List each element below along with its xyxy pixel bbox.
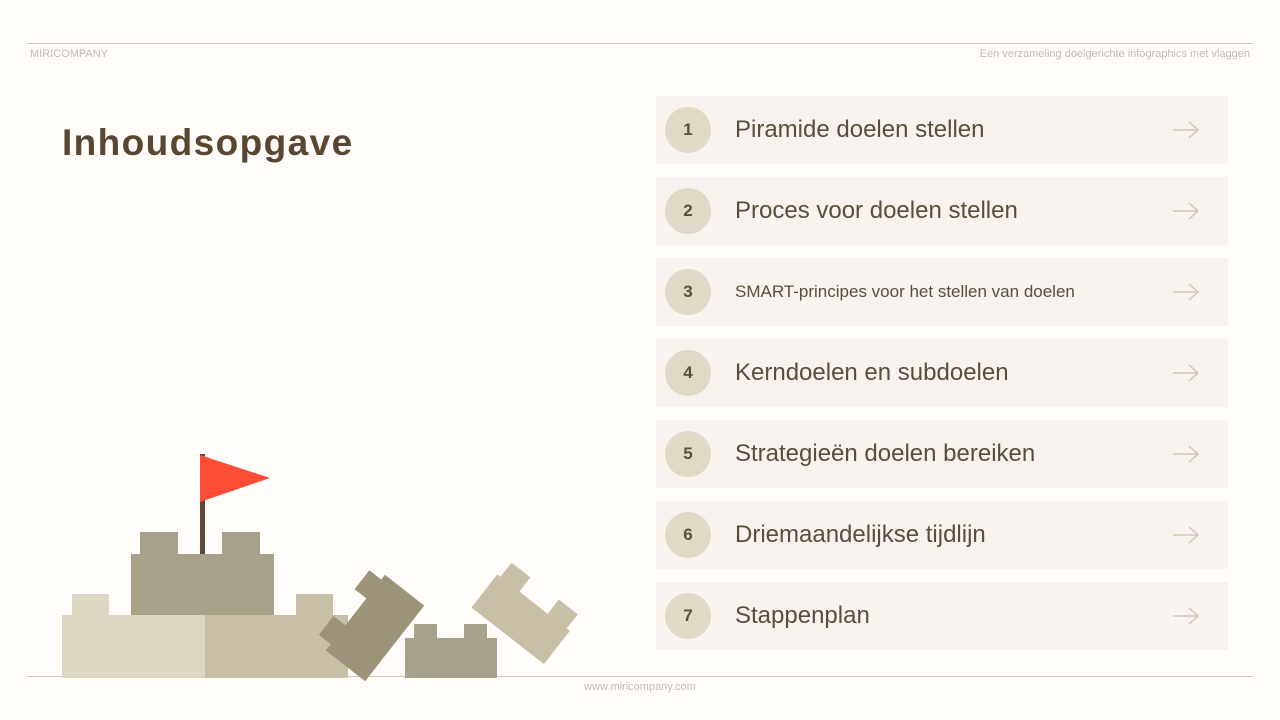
title: Inhoudsopgave [62,122,354,163]
item 4: 4 [683,363,693,382]
item 2 [656,177,1228,245]
header right: Een verzameling doelgerichte infographics met vlaggen [980,48,1250,60]
item 4 [656,339,1228,407]
item 4: Kerndoelen en subdoelen [735,359,1009,386]
item 7: 7 [683,606,693,625]
item 2: 2 [683,201,693,220]
item 6: 6 [683,525,693,544]
header left: MIRICOMPANY [30,48,108,60]
item 6 [656,501,1228,569]
item 1: Piramide doelen stellen [735,116,984,143]
item 2: Proces voor doelen stellen [735,197,1018,224]
item 7 [656,582,1228,650]
item 7: Stappenplan [735,602,870,629]
item 5: 5 [683,444,693,463]
illustration: castle with flag [62,454,578,682]
item 5: Strategieën doelen bereiken [735,440,1035,467]
item 3: SMART-principes voor het stellen van doelen [735,282,1075,301]
item 3 [656,258,1228,326]
item 3: 3 [683,282,693,301]
footer: www.miricompany.com [584,681,696,693]
item 1: 1 [683,120,693,139]
item 1 [656,96,1228,164]
item 6: Driemaandelijkse tijdlijn [735,521,986,548]
item 5 [656,420,1228,488]
